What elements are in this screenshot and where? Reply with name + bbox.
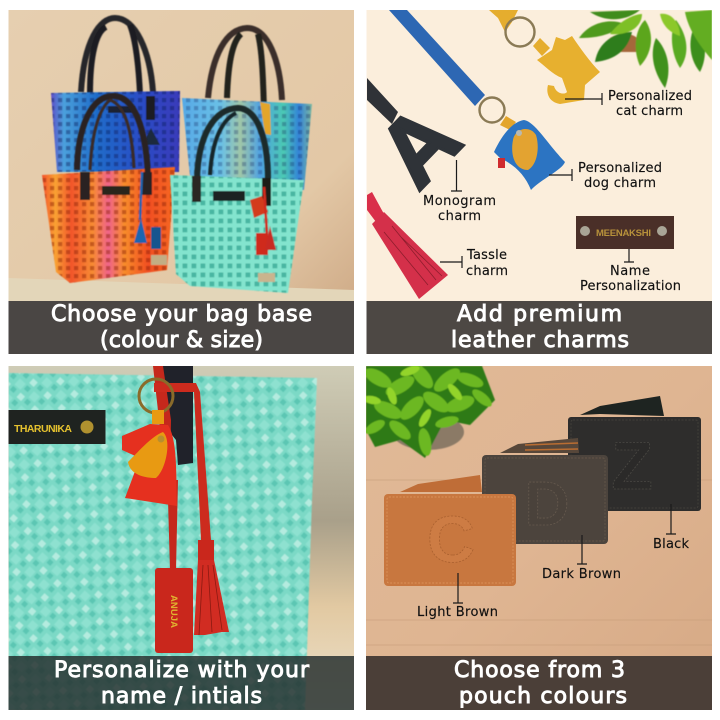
callout: dog charm xyxy=(549,161,662,191)
callout: cat charm: Personalized xyxy=(608,89,692,104)
wood background xyxy=(366,366,712,656)
name tag: Tharunika: THARUNIKA xyxy=(14,423,72,435)
callout: black xyxy=(653,504,689,552)
pouch: black xyxy=(568,396,701,511)
callout: tassle charm: Tassle xyxy=(466,248,507,263)
callout: cat charm xyxy=(565,90,691,116)
wood grain xyxy=(366,480,712,645)
floor xyxy=(8,278,354,354)
bag weave xyxy=(8,373,317,710)
icon: plant xyxy=(579,10,712,88)
caption text: pouch colours xyxy=(459,684,627,709)
callout: name personalization xyxy=(580,249,681,294)
callout: name personalization: Name xyxy=(610,264,650,279)
callout: dark brown xyxy=(542,535,621,582)
panel: add premium leather charms xyxy=(357,10,712,354)
tassel strap xyxy=(154,383,211,540)
caption text: Personalize with your xyxy=(54,658,310,683)
callout: dark brown: Dark Brown xyxy=(542,567,621,582)
name tag: Tharunika xyxy=(8,410,106,444)
callout: monogram charm: charm xyxy=(438,209,481,224)
callout: tassle charm xyxy=(440,248,507,276)
pouch: light brown xyxy=(384,475,516,586)
callout: tassle charm: charm xyxy=(466,264,508,279)
icon: cat charm xyxy=(489,10,600,104)
callout: cat charm: cat charm xyxy=(616,104,683,119)
bag: mint xyxy=(170,108,304,293)
name tag charm: Anuja: ANUJA xyxy=(168,595,179,628)
callout: dog charm: Personalized xyxy=(578,161,662,176)
panel: personalize with your name xyxy=(8,366,354,710)
callout: light brown: Light Brown xyxy=(417,605,498,620)
charm strap xyxy=(153,366,178,570)
callout: monogram charm: Monogram xyxy=(423,194,496,209)
name tag: MEENAKSHI xyxy=(596,228,651,239)
name tag charm: Anuja xyxy=(155,568,193,653)
icon: monogram charm: A xyxy=(357,84,480,206)
caption text: name / intials xyxy=(101,684,262,709)
caption bar xyxy=(366,656,712,710)
pouch: light brown: C xyxy=(427,502,475,576)
icon: blue strap and dog charm xyxy=(389,10,565,190)
callout: black: Black xyxy=(653,537,689,552)
caption bar xyxy=(8,301,354,354)
icon: tassel charm xyxy=(367,192,448,299)
icon: monogram charm xyxy=(367,78,466,194)
caption text: Choose from 3 xyxy=(454,658,625,683)
bag: teal and blue stripes xyxy=(182,28,312,190)
pouch: dark brown: D xyxy=(525,470,569,539)
bag handle xyxy=(160,366,193,465)
caption bar xyxy=(366,301,712,354)
bag: orange xyxy=(42,96,175,283)
caption text: Choose your bag base xyxy=(51,302,312,327)
pouch: black: Z xyxy=(611,428,653,504)
name tag xyxy=(576,216,674,249)
callout: dog charm: dog charm xyxy=(584,176,656,191)
caption text: (colour & size) xyxy=(100,328,263,353)
callout: name personalization: Personalization xyxy=(580,279,681,294)
caption text: leather charms xyxy=(451,328,629,353)
photo background xyxy=(8,10,354,354)
red dog charm xyxy=(122,410,177,506)
caption text: Add premium xyxy=(457,302,622,327)
pouch: dark brown xyxy=(482,438,608,544)
tassel xyxy=(194,540,229,635)
callout: light brown xyxy=(417,573,498,620)
caption bar xyxy=(8,656,354,710)
callout: monogram charm xyxy=(423,160,496,224)
panel: choose your bag base xyxy=(8,10,354,354)
icon: plant xyxy=(362,360,495,458)
key ring xyxy=(139,379,173,413)
blurred background xyxy=(8,366,354,710)
bag: blue xyxy=(51,18,180,172)
panel: choose pouch colours xyxy=(362,360,712,710)
photo background xyxy=(366,10,712,301)
